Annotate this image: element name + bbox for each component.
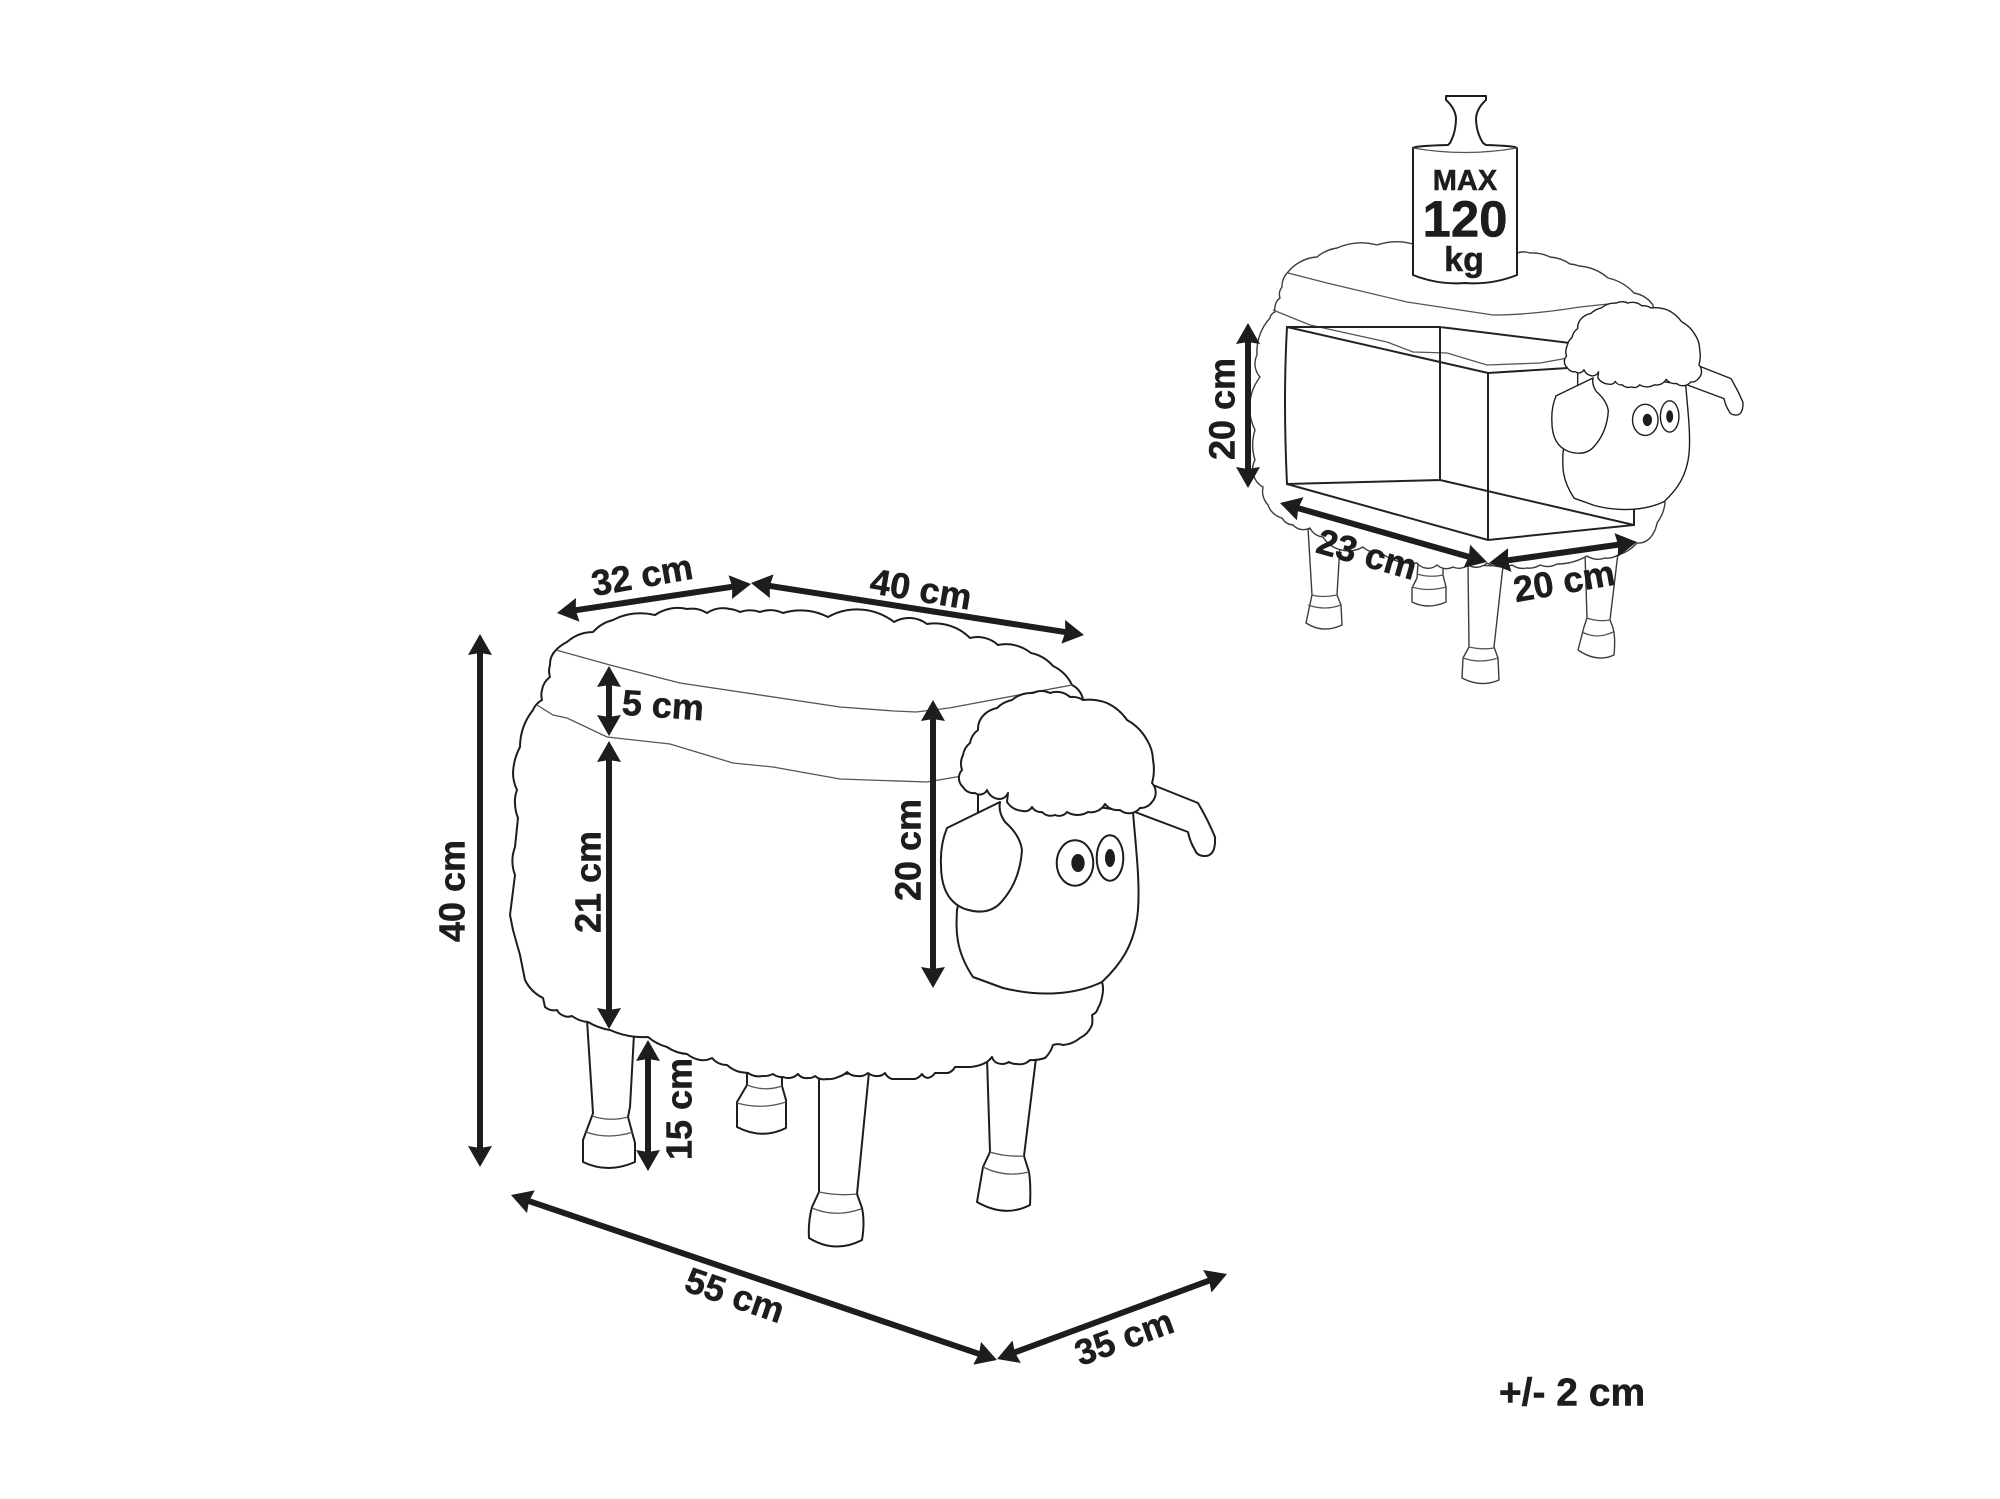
arrow: 40 cm seat width: 40 cm <box>867 560 975 618</box>
small wool cap <box>1564 302 1702 388</box>
sheep head <box>941 691 1215 994</box>
rear middle leg <box>737 1070 786 1134</box>
load label: MAX <box>1433 165 1498 197</box>
storage view sheep illustration <box>1250 242 1743 684</box>
tolerance note: +/- 2 cm <box>1499 1372 1645 1414</box>
arrow: 5 cm cushion: 5 cm <box>621 682 705 728</box>
arrow: 55 cm length: 55 cm <box>680 1259 790 1331</box>
right leg <box>977 1058 1036 1211</box>
main sheep illustration <box>510 608 1215 1247</box>
small face <box>1563 370 1690 510</box>
right ear <box>1135 785 1215 856</box>
arrow: 40 cm height: 40 cm <box>432 840 472 942</box>
storage compartment wireframe <box>1285 327 1634 540</box>
arrow: 40 cm seat width <box>766 560 1069 633</box>
load label: kg <box>1444 241 1484 279</box>
eyes <box>1057 835 1123 886</box>
seat seam lines <box>537 650 1072 782</box>
arrow: 23 cm compartment depth <box>1294 507 1473 588</box>
arrow: 35 cm width: 35 cm <box>1069 1300 1179 1374</box>
arrow: 21 cm body: 21 cm <box>568 831 608 933</box>
arrow: 20 cm storage: 20 cm <box>888 799 928 901</box>
left ear <box>941 802 1022 912</box>
arrow: 55 cm length <box>525 1200 983 1355</box>
front leg <box>809 1072 869 1247</box>
small legs <box>1306 528 1618 684</box>
small eyes <box>1633 401 1679 435</box>
arrow: 15 cm legs: 15 cm <box>658 1058 700 1160</box>
weight top rim <box>1413 148 1517 152</box>
load label: 120 <box>1422 190 1508 248</box>
load label <box>1422 165 1508 279</box>
small seat seams <box>1273 273 1627 365</box>
arrow: 35 cm width <box>1011 1279 1213 1374</box>
small left ear <box>1552 378 1608 453</box>
weight outline <box>1413 96 1517 283</box>
wool cap <box>959 691 1156 816</box>
arrow: 20 cm compartment width: 20 cm <box>1510 552 1618 610</box>
small fleece body <box>1250 242 1665 569</box>
small right ear <box>1687 366 1743 415</box>
small head <box>1552 302 1743 510</box>
fleece body <box>510 608 1103 1079</box>
back-left leg <box>583 1020 635 1168</box>
arrow: 23 cm compartment depth: 23 cm <box>1312 520 1422 588</box>
icon: max load weight <box>1413 96 1517 283</box>
arrow: 32 cm seat depth <box>572 546 736 611</box>
arrow: 32 cm seat depth: 32 cm <box>588 546 696 604</box>
arrow: 20 cm compartment height: 20 cm <box>1202 358 1242 460</box>
arrow: 20 cm compartment height <box>1202 338 1248 473</box>
face <box>957 790 1139 994</box>
